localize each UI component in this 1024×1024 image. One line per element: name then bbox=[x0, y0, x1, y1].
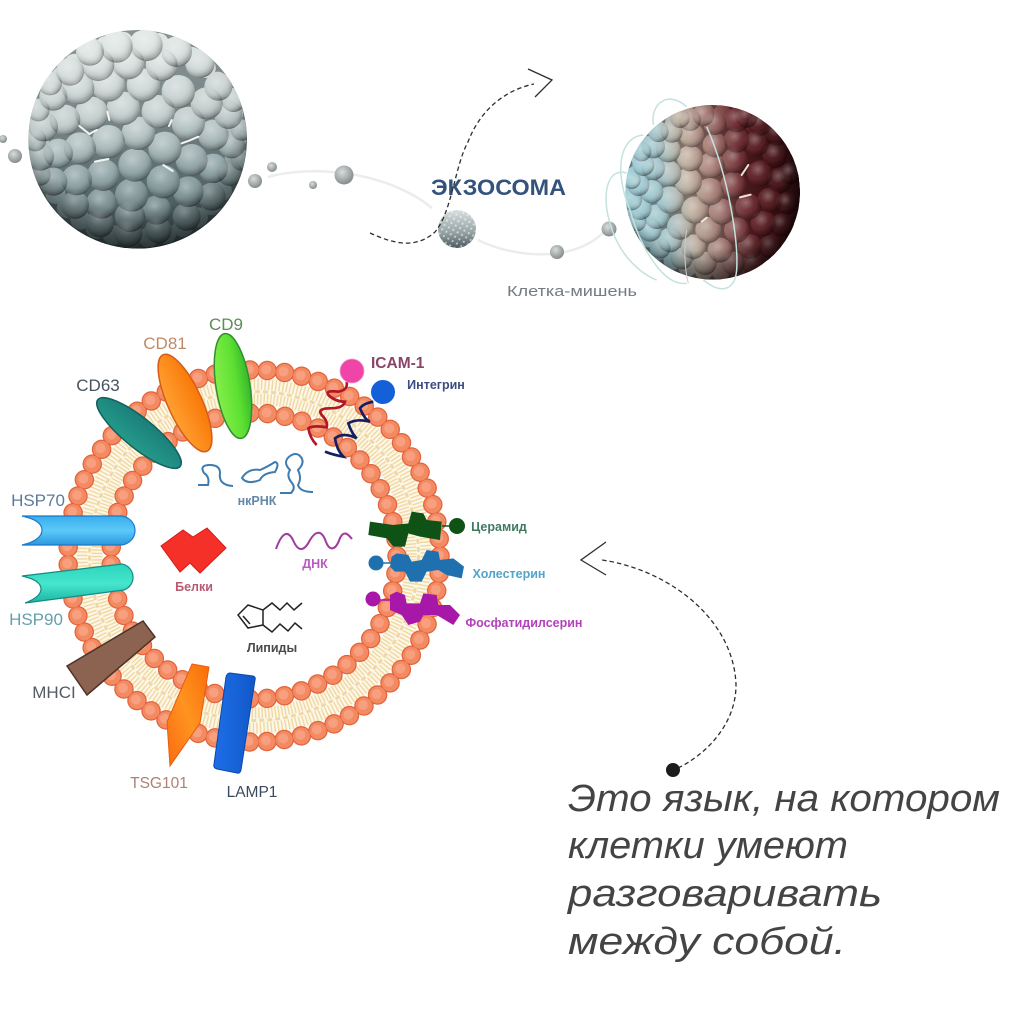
protein: TSG101: TSG101 bbox=[130, 775, 188, 792]
protein: ICAM-1 bbox=[308, 355, 425, 445]
cargo: proteins: Белки bbox=[175, 580, 213, 594]
protein: integrin bbox=[325, 378, 465, 457]
protein: LAMP1: LAMP1 bbox=[227, 784, 277, 801]
cargo: lipids bbox=[238, 603, 302, 655]
lipid: cholesterol: Холестерин bbox=[473, 567, 545, 581]
protein: MHCI bbox=[32, 621, 155, 702]
lipid tails bbox=[82, 384, 426, 728]
caption text: клетки умеют bbox=[568, 825, 848, 867]
membrane ring of the exosome bbox=[67, 369, 440, 742]
protein: HSP90: HSP90 bbox=[9, 610, 63, 629]
cargo: DNA bbox=[276, 533, 352, 571]
protein: HSP90 bbox=[9, 564, 133, 629]
lipid: phosphatidylserine: Фосфатидилсерин bbox=[466, 616, 582, 630]
protein: integrin: Интегрин bbox=[407, 378, 465, 392]
label: target cell: Клетка-мишень bbox=[507, 283, 637, 300]
protein: CD9: CD9 bbox=[209, 315, 243, 334]
cargo: proteins bbox=[161, 528, 226, 594]
protein: CD81 bbox=[143, 334, 222, 458]
protein: CD81: CD81 bbox=[143, 334, 187, 353]
protein: HSP70 bbox=[11, 491, 135, 545]
protein: ICAM-1: ICAM-1 bbox=[371, 355, 425, 372]
protein: CD63: CD63 bbox=[76, 376, 120, 395]
heading: exosome: ЭКЗОСОМА bbox=[431, 175, 566, 200]
exosome sphere bbox=[438, 210, 476, 248]
flow line: exosome to target cell bbox=[478, 232, 604, 254]
inner lipid heads bbox=[110, 412, 397, 699]
cargo: small non-coding RNA: нкРНК bbox=[238, 494, 277, 508]
protein: HSP70: HSP70 bbox=[11, 491, 65, 510]
caption text bbox=[567, 778, 1000, 963]
protein: LAMP1 bbox=[214, 673, 277, 801]
lipid: ceramide: Церамид bbox=[471, 520, 527, 534]
caption text: между собой. bbox=[568, 921, 846, 963]
lipid: phosphatidylserine bbox=[366, 592, 582, 630]
cargo: small non-coding RNA bbox=[198, 454, 313, 508]
target cell sphere bbox=[606, 99, 801, 289]
dashed arrow: lower bbox=[581, 542, 736, 777]
cargo: DNA: ДНК bbox=[302, 557, 328, 571]
caption text: Это язык, на котором bbox=[568, 778, 1000, 820]
lipid: cholesterol bbox=[368, 550, 545, 582]
released vesicles bbox=[0, 135, 616, 259]
protein: TSG101 bbox=[130, 664, 209, 792]
caption text: разговаривать bbox=[567, 873, 882, 915]
protein: MHCI: MHCI bbox=[32, 683, 76, 702]
outer lipid heads bbox=[67, 369, 440, 742]
donor cell sphere bbox=[24, 29, 252, 249]
protein: CD63 bbox=[76, 376, 190, 478]
dashed arrow: upper bbox=[370, 69, 552, 243]
orbit lines around target cell bbox=[606, 99, 737, 289]
flow line: particles from donor cell to exosome bbox=[268, 171, 432, 208]
protein: CD9 bbox=[208, 315, 258, 441]
cargo: lipids: Липиды bbox=[247, 641, 297, 655]
lipid: ceramide bbox=[368, 512, 527, 547]
